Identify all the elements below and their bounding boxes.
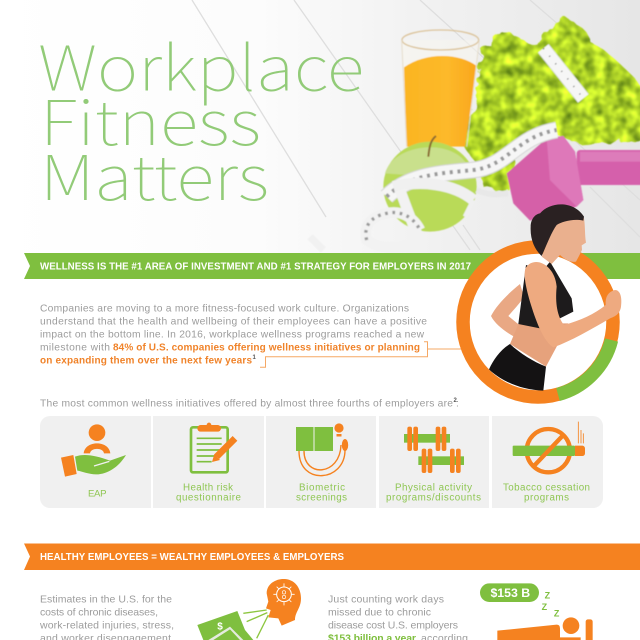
title: Workplace	[38, 18, 364, 108]
icon: no smoking	[513, 422, 585, 472]
title	[38, 18, 364, 218]
card: health risk questionnaire: Health risk	[183, 482, 233, 494]
initiatives intro: The most common wellness initiatives offered by almost three fourths of employers are	[40, 398, 453, 410]
card: biometric screenings: Biometric	[299, 482, 345, 494]
woman in ring	[463, 204, 621, 397]
icon: clipboard	[191, 423, 235, 472]
photo background	[0, 0, 640, 254]
title: Matters	[40, 128, 269, 218]
shorts	[489, 344, 546, 391]
icon: hand holding person	[61, 424, 126, 477]
card: tobacco cessation: Tobacco cessation	[503, 482, 590, 494]
orange banner: HEALTHY EMPLOYEES = WEALTHY EMPLOYEES & EMPLOYERS	[40, 552, 345, 563]
callout bracket	[260, 342, 462, 367]
text: cost estimates: costs of chronic diseases,	[40, 606, 158, 618]
text: cost estimates: Estimates in the U.S. for the	[40, 594, 172, 606]
text: work days missed: missed due to chronic	[328, 606, 431, 618]
apple	[383, 136, 477, 232]
text: cost estimates: work-related injuries, stress,	[39, 620, 174, 632]
cards row	[40, 416, 603, 508]
sleep letters: Z	[542, 602, 548, 612]
lettuce	[462, 20, 640, 192]
icon: blood pressure monitor	[296, 423, 348, 476]
progress ring	[463, 247, 613, 397]
front arm	[525, 262, 621, 347]
$153 B badge: $153 B	[490, 586, 530, 600]
card: health risk questionnaire	[153, 416, 264, 508]
initiatives intro: 2	[454, 398, 458, 404]
card: biometric screenings	[266, 416, 376, 508]
card: tobacco cessation	[492, 416, 603, 508]
card: EAP: EAP	[88, 488, 106, 500]
dumbbell	[507, 136, 640, 221]
text: work days missed: Just counting work days	[328, 594, 444, 606]
sleeping figure	[497, 617, 593, 640]
hair	[531, 204, 584, 256]
photo: healthy food and dumbbell	[310, 20, 640, 250]
sleep letters	[542, 591, 560, 618]
intro paragraph: on expanding them over the next few years	[40, 356, 252, 366]
icon: sleeping employee	[480, 583, 593, 640]
back arm	[491, 284, 524, 337]
initiatives intro: :	[456, 398, 459, 410]
intro paragraph: milestone with	[40, 342, 110, 354]
sleep letters: Z	[545, 591, 551, 601]
intro paragraph	[40, 304, 427, 366]
card: health risk questionnaire: questionnaire	[176, 492, 242, 504]
text: work days missed	[328, 594, 468, 640]
icon: dumbbells	[404, 427, 464, 473]
black top	[518, 262, 573, 328]
glass	[402, 30, 479, 147]
title: Fitness	[40, 73, 261, 163]
intro paragraph: impact on the bottom line. In 2016, workplace wellness programs reached a new	[40, 330, 425, 340]
card: EAP	[40, 416, 151, 508]
measuring tape	[310, 48, 583, 250]
card: physical activity: Physical activity	[395, 482, 472, 494]
midriff	[510, 323, 568, 367]
runner	[489, 204, 621, 391]
intro paragraph: understand that the health and wellbeing of their employees can have a positive	[40, 316, 427, 328]
card: physical activity	[379, 416, 489, 508]
text: work days missed: disease cost U.S. employers	[328, 620, 458, 632]
card: biometric screenings: screenings	[296, 492, 347, 504]
icon: head and money	[197, 579, 301, 640]
intro paragraph: 84% of U.S. companies offering wellness initiatives or planning	[113, 342, 420, 354]
card: physical activity: programs/discounts	[386, 492, 481, 504]
green banner	[24, 253, 640, 279]
neck and face	[542, 213, 586, 264]
orange banner	[24, 544, 640, 570]
green banner: WELLNESS IS THE #1 AREA OF INVESTMENT AND #1 STRATEGY FOR EMPLOYERS IN 2017	[40, 262, 471, 272]
text: cost estimates	[39, 594, 174, 640]
intro paragraph: 1	[252, 355, 256, 361]
sleep letters: Z	[554, 608, 560, 618]
card: tobacco cessation: programs	[524, 492, 569, 504]
icon: head and money: $	[217, 621, 223, 632]
intro paragraph: Companies are moving to a more fitness-focused work culture. Organizations	[40, 304, 409, 314]
